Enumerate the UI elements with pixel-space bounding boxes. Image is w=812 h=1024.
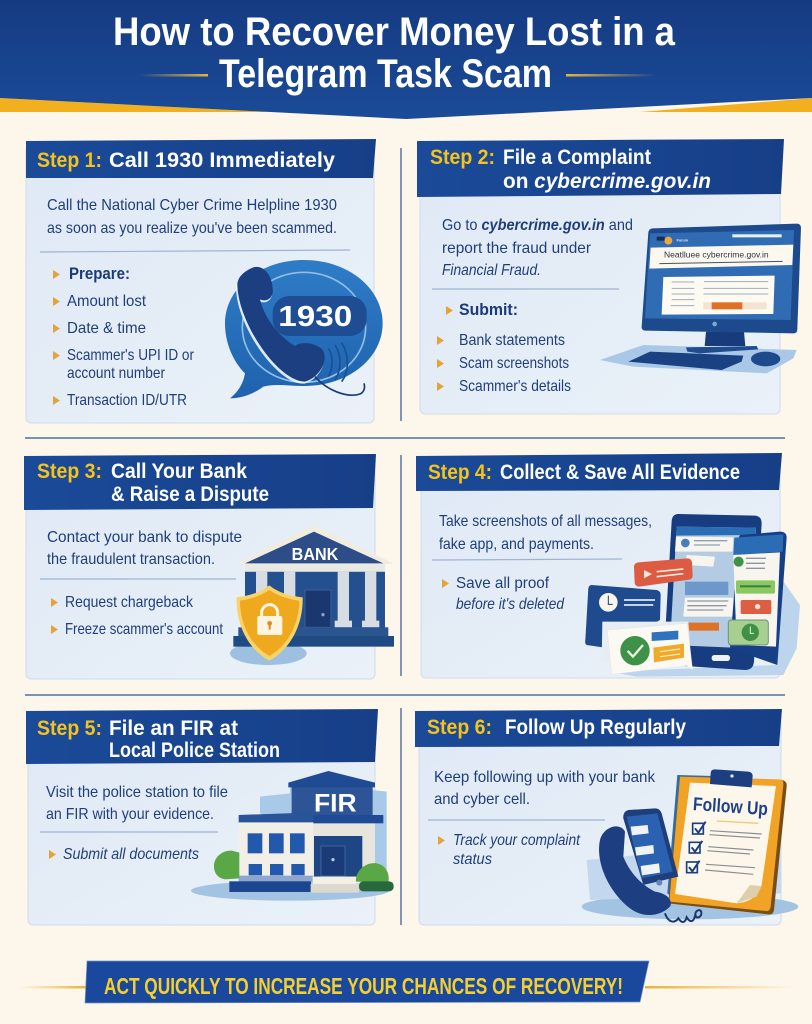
icon: desktop computer: Forum <box>677 239 689 243</box>
step 4 checklist: before it's deleted <box>456 596 565 613</box>
step 1 checklist: Transaction ID/UTR <box>67 392 187 409</box>
step 5 heading: Step 5: <box>37 716 102 740</box>
step 6 checklist: status <box>453 851 492 868</box>
step 2 heading: File a Complaint <box>503 145 651 169</box>
title <box>113 10 676 96</box>
step 1 heading: Step 1: <box>37 148 102 172</box>
step 2 checklist: Submit: <box>459 300 518 319</box>
icon: phone helpline bubble <box>225 260 383 398</box>
step 3 description: Contact your bank to dispute <box>47 529 242 546</box>
icon: follow up clipboard with phone: Follow Up <box>692 793 769 819</box>
step 2 heading <box>417 139 784 197</box>
step 1 checklist: Scammer's UPI ID or <box>67 347 195 364</box>
step 5 description <box>46 784 228 823</box>
step 5 heading <box>26 709 378 764</box>
step 6 heading: Step 6: <box>427 715 492 739</box>
step 4 checklist: Save all proof <box>456 575 550 592</box>
panel: step 6 <box>415 709 798 925</box>
step 4 heading <box>416 453 782 491</box>
step 6 description: and cyber cell. <box>434 791 530 808</box>
step 5 description: Visit the police station to file <box>46 784 228 801</box>
step 3 heading: Step 3: <box>37 459 102 483</box>
step 4 description: Take screenshots of all messages, <box>439 513 652 530</box>
icon: bank building with shield <box>230 525 394 665</box>
title: How to Recover Money Lost in a <box>113 10 676 54</box>
step 4 description <box>439 513 652 553</box>
step 3 description: the fraudulent transaction. <box>47 551 215 568</box>
step 1 checklist: account number <box>67 365 166 382</box>
step 2 checklist: Scammer's details <box>459 378 571 395</box>
security shield <box>237 585 303 661</box>
icon: desktop computer: Neatlluee cybercrime.gov.in <box>664 251 769 260</box>
step 5 heading: File an FIR at <box>109 716 238 740</box>
step 2 checklist: Scam screenshots <box>459 355 569 372</box>
1930 badge <box>273 296 367 336</box>
step 4 description: fake app, and payments. <box>439 536 594 553</box>
red video chat bubble <box>634 558 693 587</box>
step 5 heading: Local Police Station <box>109 738 280 762</box>
icon: bank building with shield: BANK <box>292 544 339 564</box>
header banner <box>0 0 812 119</box>
step 2 heading: on cybercrime.gov.in <box>503 169 711 193</box>
step 2 checklist: Bank statements <box>459 332 565 349</box>
panel: step 4 <box>416 453 800 678</box>
step 1 checklist <box>53 264 195 409</box>
shrubs <box>214 851 394 891</box>
clock card <box>585 585 661 648</box>
step 3 heading: Call Your Bank <box>111 459 247 483</box>
step 1 checklist: Prepare: <box>69 264 130 283</box>
step 1 checklist: Amount lost <box>67 293 147 310</box>
step 1 heading: Call 1930 Immediately <box>109 148 335 172</box>
step 6 heading: Follow Up Regularly <box>505 715 686 739</box>
step 4 heading: Step 4: <box>428 460 492 484</box>
step 6 checklist <box>438 832 580 868</box>
panel: step 1 <box>26 139 383 423</box>
step 4 heading: Collect & Save All Evidence <box>500 460 740 484</box>
step 3 heading: & Raise a Dispute <box>111 482 269 506</box>
step 3 checklist <box>51 594 223 638</box>
icon: follow up clipboard with phone <box>582 769 798 922</box>
step 2 description <box>442 217 633 279</box>
step 1 description <box>47 197 337 237</box>
step 6 description <box>434 769 656 808</box>
title: Telegram Task Scam <box>219 52 552 96</box>
icon: phones, chats and evidence documents <box>585 514 800 677</box>
icon: FIR police station: FIR <box>314 790 357 818</box>
step 1 description: as soon as you realize you've been scammed. <box>47 220 337 237</box>
step 2 description: Financial Fraud. <box>442 262 541 279</box>
step 5 checklist: Submit all documents <box>63 846 199 863</box>
step 6 checklist: Track your complaint <box>453 832 580 849</box>
step 1 description: Call the National Cyber Crime Helpline 1930 <box>47 197 337 214</box>
step 3 checklist: Request chargeback <box>65 594 194 611</box>
step 2 description: report the fraud under <box>442 240 592 257</box>
panel: step 5 <box>26 709 394 925</box>
step 2 heading: Step 2: <box>430 145 495 169</box>
step 1 checklist: Date & time <box>67 320 146 337</box>
step 2 checklist <box>437 300 571 395</box>
divider lines <box>25 148 785 925</box>
icon: desktop computer <box>600 224 801 373</box>
panel: step 2 <box>417 139 801 414</box>
step 3 checklist: Freeze scammer's account <box>65 621 223 638</box>
step 3 heading <box>24 454 376 510</box>
document with green check <box>602 622 693 674</box>
step 3 description <box>47 529 242 568</box>
panel: step 3 <box>24 454 394 679</box>
step 2 description: Go to cybercrime.gov.in and <box>442 217 633 234</box>
footer call-to-action banner <box>20 961 795 1003</box>
step 5 description: an FIR with your evidence. <box>46 806 214 823</box>
step 4 checklist <box>442 575 565 613</box>
step 1 heading <box>26 139 376 178</box>
footer call-to-action banner: ACT QUICKLY TO INCREASE YOUR CHANCES OF RECOVERY! <box>104 973 623 999</box>
green clock badge <box>728 620 768 645</box>
step 6 heading <box>415 709 782 747</box>
icon: FIR police station <box>191 771 394 901</box>
1930 badge: 1930 <box>278 301 352 333</box>
step 6 description: Keep following up with your bank <box>434 769 656 786</box>
